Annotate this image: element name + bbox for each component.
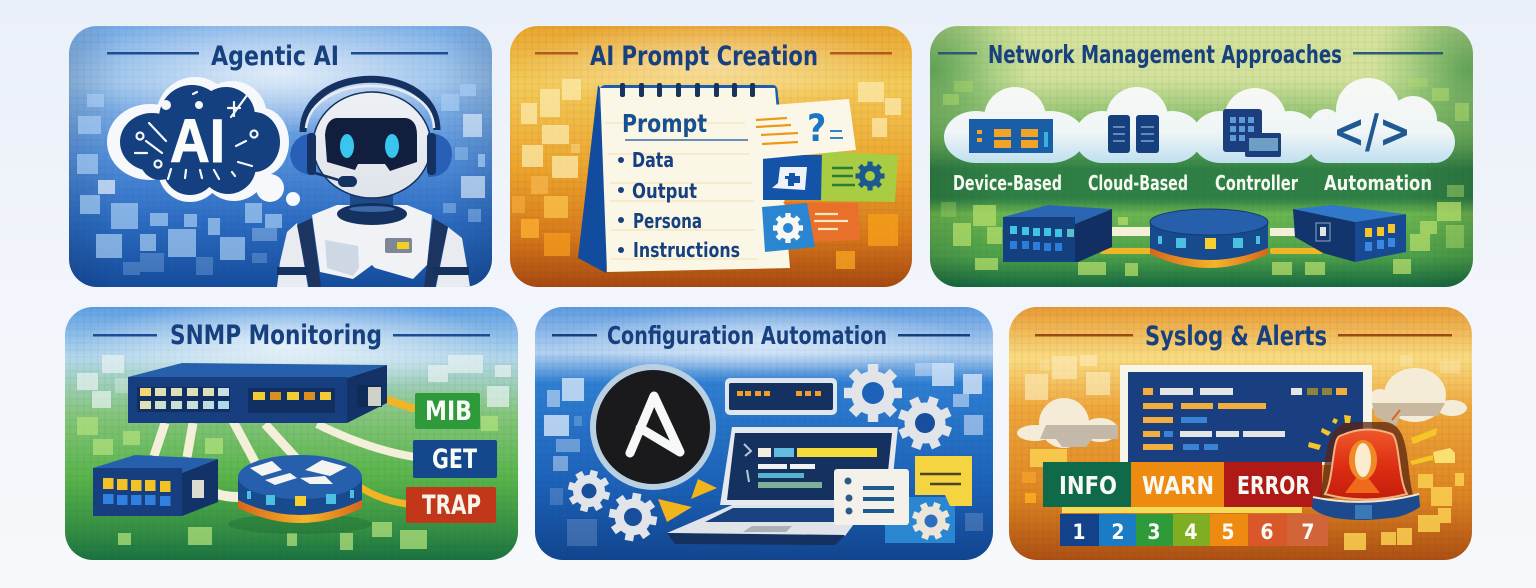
log rows	[1143, 388, 1347, 450]
notebook list: Output	[632, 179, 697, 203]
robot head	[313, 92, 431, 198]
sticky note	[915, 456, 972, 506]
robot arms	[277, 218, 470, 287]
notebook list: Instructions	[633, 238, 740, 262]
notebook list	[618, 148, 740, 262]
robot torso	[312, 205, 432, 279]
network switch left	[1003, 205, 1112, 262]
network hub	[1150, 209, 1268, 268]
log monitor	[1120, 365, 1372, 465]
tag: MIB: MIB	[425, 396, 472, 427]
card: orange lines	[783, 202, 860, 242]
approach labels	[954, 174, 1431, 190]
approach labels: Cloud-Based	[1088, 171, 1188, 195]
panel: Syslog & Alerts	[1009, 307, 1472, 560]
notebook heading: Prompt	[622, 109, 707, 138]
small gear	[907, 497, 955, 545]
small network switch	[93, 455, 218, 516]
severity levels bar	[1043, 462, 1322, 513]
title: Network Management Approaches: Network Management Approaches	[988, 40, 1342, 69]
card: blue puzzle	[763, 155, 822, 200]
title: Configuration Automation: Configuration Automation	[607, 321, 887, 350]
syslog severity numbers: 6	[1260, 520, 1274, 544]
severity levels bar: ERROR	[1237, 471, 1310, 500]
title: SNMP Monitoring: SNMP Monitoring	[170, 320, 382, 351]
card: blue gear	[762, 203, 815, 252]
icon: Ansible logo	[590, 364, 716, 490]
tag: TRAP: TRAP	[422, 490, 481, 521]
robot headset arc	[303, 79, 437, 132]
network switch right	[1293, 205, 1406, 262]
icon: network appliance	[725, 378, 837, 415]
syslog severity numbers: 4	[1184, 520, 1198, 544]
cables	[154, 398, 415, 504]
icon: AI thought cloud: AI	[170, 107, 225, 175]
gears	[563, 364, 960, 545]
panel: Agentic AI	[65, 10, 495, 287]
notebook list: Data	[632, 148, 674, 172]
robot ear cups	[290, 133, 452, 177]
title: AI Prompt Creation: AI Prompt Creation	[590, 41, 818, 72]
icon: robot with headset	[277, 79, 470, 287]
tag: MIB	[415, 393, 480, 429]
approach labels: Device-Based	[953, 171, 1062, 195]
syslog severity numbers: 5	[1221, 520, 1235, 544]
card: green gear	[821, 151, 898, 202]
icon: AI thought cloud	[107, 77, 300, 206]
syslog severity numbers: 3	[1147, 520, 1161, 544]
title: Agentic AI: Agentic AI	[211, 41, 339, 72]
syslog severity numbers: 2	[1111, 520, 1125, 544]
cloud: cloud-based	[1075, 87, 1202, 163]
notebook list: Persona	[633, 209, 702, 233]
approach labels: Automation	[1324, 171, 1432, 195]
syslog severity numbers: 7	[1301, 520, 1315, 544]
panel: SNMP Monitoring	[65, 297, 518, 560]
tag: TRAP	[406, 487, 496, 523]
callout card	[834, 469, 909, 525]
robot neck	[337, 195, 407, 225]
tag: GET	[413, 440, 497, 478]
icon: laptop	[667, 427, 898, 545]
cloud: automation	[1306, 78, 1455, 163]
card: question	[756, 99, 856, 159]
panel: AI Prompt Creation	[510, 20, 912, 287]
network cables	[1095, 227, 1323, 254]
syslog severity numbers: 1	[1072, 520, 1086, 544]
panel: Network Management Approaches	[930, 26, 1473, 287]
cloud right	[1368, 368, 1467, 427]
arrows	[658, 479, 717, 522]
panel: Configuration Automation	[535, 306, 993, 560]
icon: spiral notebook	[578, 83, 790, 273]
icon: alarm siren	[1308, 410, 1455, 520]
blue card	[885, 497, 955, 543]
severity levels bar: INFO	[1059, 471, 1117, 500]
robot microphone	[315, 173, 342, 181]
syslog severity numbers	[1060, 514, 1328, 546]
approach labels: Controller	[1215, 171, 1298, 195]
cloud: device-based	[944, 87, 1085, 163]
cloud left	[1017, 398, 1118, 448]
cloud: controller	[1192, 88, 1318, 163]
large network switch	[128, 363, 387, 423]
card: question: ?	[807, 107, 826, 150]
cloud: automation: </>	[1333, 104, 1411, 158]
router	[228, 455, 372, 534]
tag: GET: GET	[432, 444, 477, 475]
severity levels bar: WARN	[1142, 471, 1214, 500]
title: Syslog & Alerts: Syslog & Alerts	[1145, 321, 1327, 352]
robot visor and eyes	[325, 118, 417, 171]
